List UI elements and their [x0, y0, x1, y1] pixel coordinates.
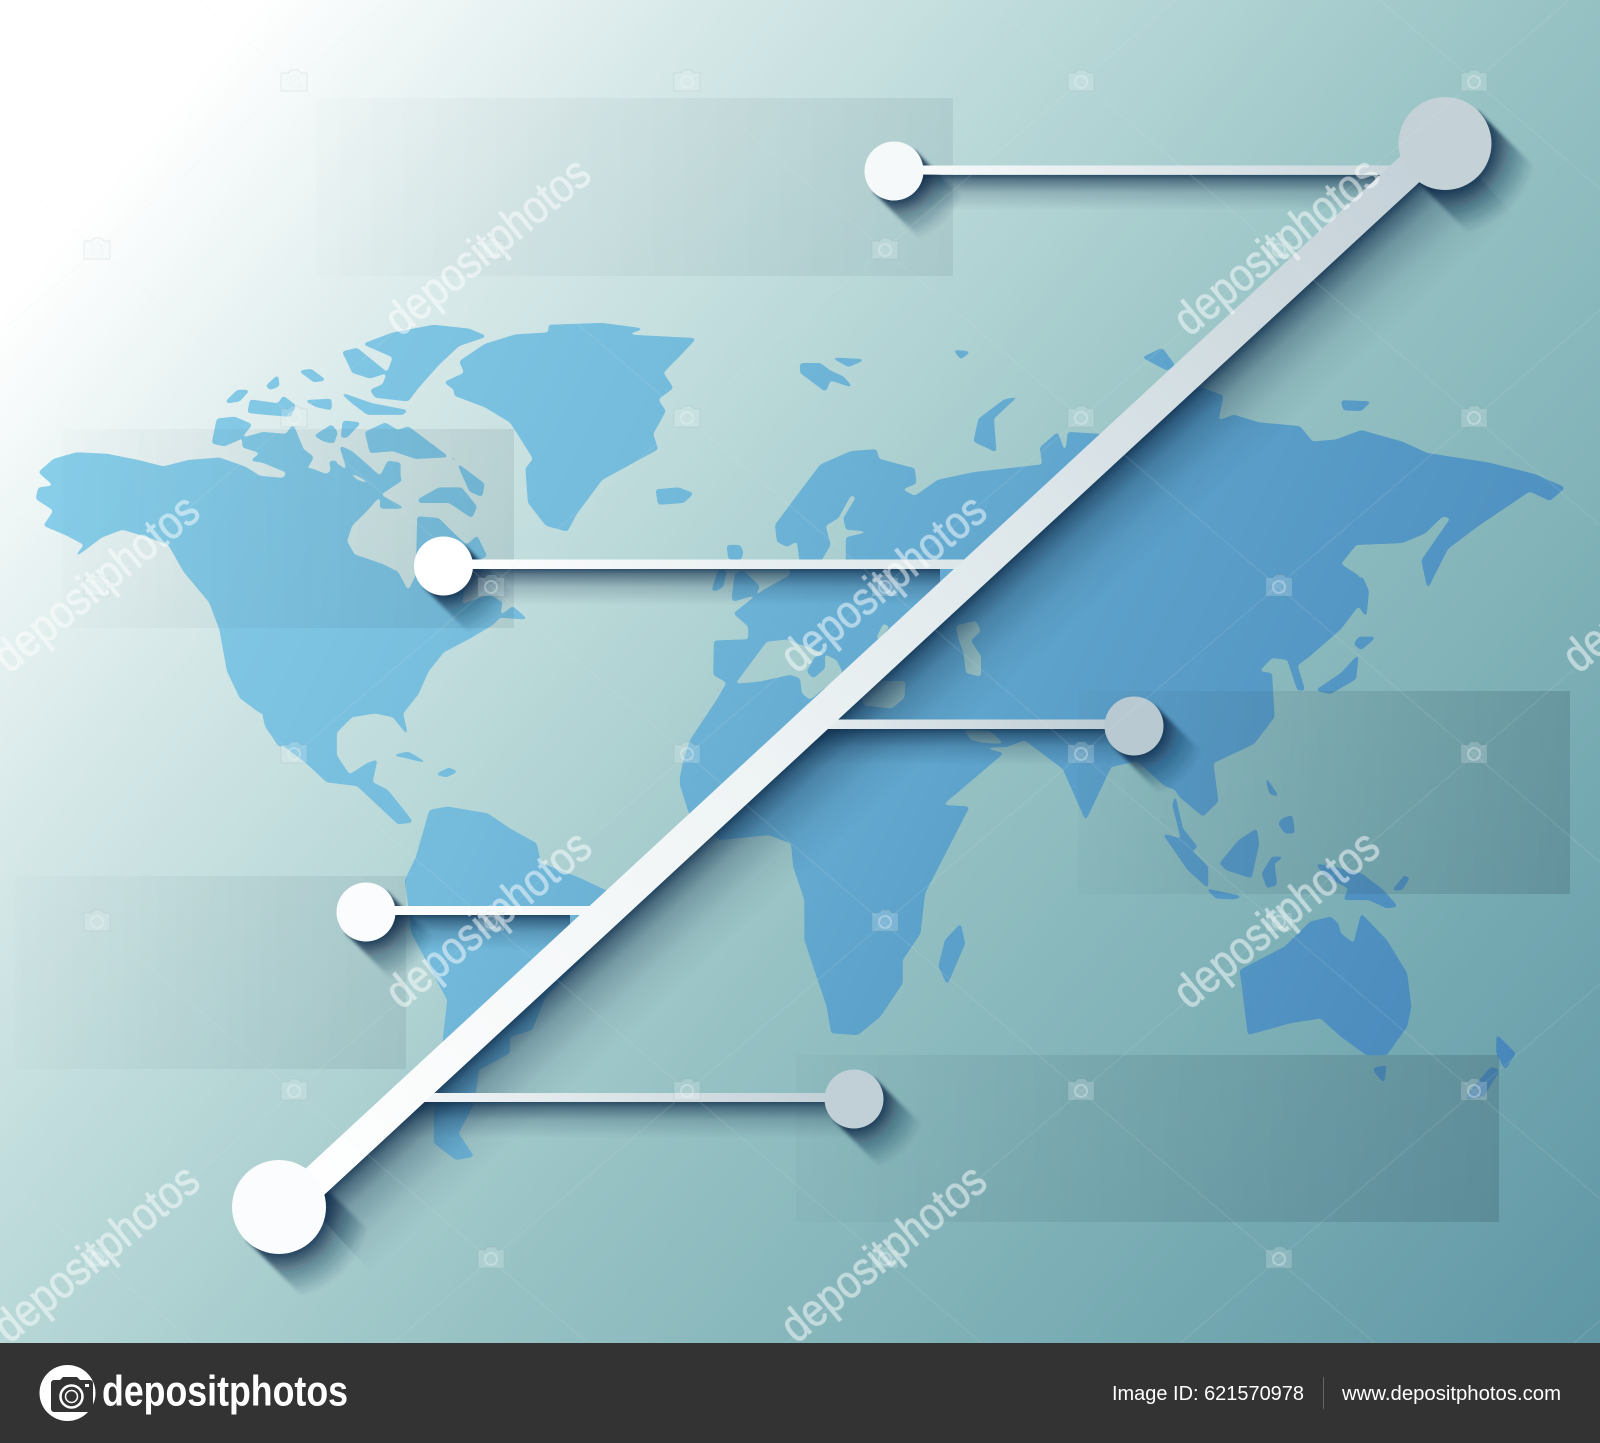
- watermark text: depositphotos: [1163, 819, 1389, 1018]
- footer website: www.depositphotos.com: [1341, 1383, 1561, 1405]
- watermark text: depositphotos: [1163, 146, 1389, 345]
- map: Eurasia and Africa: [680, 340, 1570, 1040]
- connector line: third: [810, 720, 1134, 729]
- text panel: lower left: [15, 876, 406, 1069]
- watermark text: depositphotos: [770, 1153, 996, 1352]
- text panel: top: [316, 98, 953, 276]
- footer logo icon: [40, 1365, 96, 1421]
- connector line: top: [894, 166, 1399, 174]
- watermark text: depositphotos: [770, 483, 996, 682]
- footer logo wordmark: depositphotos: [102, 1368, 348, 1416]
- map: North America: [36, 452, 526, 824]
- footer separator: [1323, 1377, 1324, 1409]
- main diagonal bar: [264, 150, 1454, 1207]
- shadow: connector lines: [366, 175, 1400, 1138]
- circle: node one: [864, 142, 924, 200]
- map: Southeast Asia and Oceania: [1155, 810, 1525, 1100]
- map: South America: [405, 806, 606, 1160]
- circle: node two: [414, 536, 473, 596]
- circle: node four: [336, 882, 396, 942]
- footer bar: [0, 1343, 1600, 1443]
- footer image id: Image ID: 621570978: [1112, 1383, 1304, 1405]
- map: Greenland and Arctic islands: [212, 323, 694, 531]
- watermark camera icons: [84, 70, 1487, 1268]
- text panel: upper left: [62, 429, 514, 628]
- circle: top right end: [1398, 97, 1492, 190]
- connector line: second: [444, 560, 969, 569]
- circle: bottom left end: [232, 1160, 326, 1254]
- circle: node three: [1104, 696, 1164, 756]
- connector line: fourth: [366, 906, 598, 915]
- text panel: bottom right: [796, 1055, 1499, 1222]
- watermark text: depositphotos: [375, 819, 601, 1018]
- connector line: fifth: [400, 1093, 854, 1102]
- watermark text: depositphotos: [374, 146, 600, 345]
- world map: [30, 320, 1570, 1165]
- shadow: main diagonal bar: [311, 150, 1515, 1273]
- shadow: circles: [246, 111, 1543, 1305]
- text panel: middle right: [1078, 691, 1570, 894]
- circle: node five: [824, 1070, 884, 1128]
